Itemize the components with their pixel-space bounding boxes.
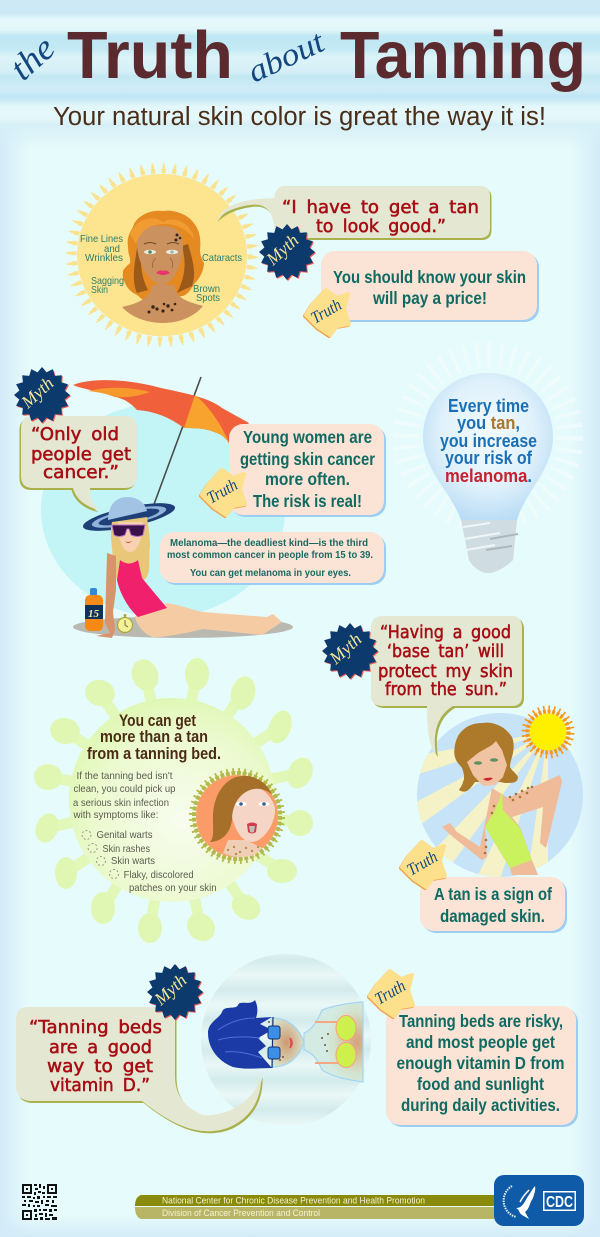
bulb text: melanoma. <box>445 466 532 486</box>
truth box 1: You should know your skin <box>333 267 526 287</box>
myth speech bubble 4: “Tanning beds <box>29 1017 162 1038</box>
footer organization bars: Division of Cancer Prevention and Control <box>162 1208 320 1219</box>
myth speech bubble 2 <box>20 416 137 512</box>
symptom list: patches on your skin <box>129 882 217 894</box>
myth speech bubble 4: vitamin D.” <box>50 1075 150 1096</box>
myth speech bubble 1: “I have to get a tan <box>282 197 479 218</box>
panel: base tan myth <box>322 616 583 933</box>
myth badge 3 <box>322 623 379 680</box>
sunbathing woman <box>73 497 293 638</box>
myth badge 2 <box>14 367 71 424</box>
subtitle: Your natural skin color is great the way it is! <box>53 103 546 131</box>
infection paragraph <box>73 770 176 821</box>
truth badge 2: Truth <box>204 475 241 507</box>
sunscreen bottle: 15 <box>88 608 100 620</box>
myth badge 2: Myth <box>17 373 57 413</box>
truth box 3: damaged skin. <box>440 906 545 926</box>
truth badge 1: Truth <box>308 295 345 327</box>
damage labels: Cataracts <box>202 252 242 264</box>
truth box 2 <box>229 424 386 517</box>
myth speech bubble 3: protect my skin <box>378 661 513 682</box>
beach umbrella <box>73 377 249 507</box>
HHS eagle <box>504 1186 535 1219</box>
truth box 3: A tan is a sign of <box>434 884 552 904</box>
woman with tan damage <box>442 723 562 875</box>
myth speech bubble 2: people get <box>31 444 131 465</box>
long blonde hair <box>111 517 150 580</box>
footer organization bars: National Center for Chronic Disease Prevention and Health Promotion <box>162 1196 425 1206</box>
panel: myth 1 look good <box>67 164 539 346</box>
truth box 4: Tanning beds are risky, <box>399 1011 563 1031</box>
bulb text: Every time <box>448 396 529 416</box>
bulb text: your risk of <box>445 448 533 468</box>
myth speech bubble 2: cancer.” <box>43 462 119 483</box>
damage labels: Sagging <box>91 275 124 287</box>
symptom list: Skin rashes <box>102 843 150 855</box>
panel: light bulb melanoma fact <box>406 355 570 573</box>
infection paragraph: a serious skin infection <box>73 797 169 809</box>
CDC and HHS logo <box>494 1175 584 1226</box>
myth speech bubble 2: “Only old <box>31 424 119 445</box>
truth box 4: during daily activities. <box>401 1095 560 1115</box>
infection heading: more than a tan <box>100 728 208 746</box>
footer organization bars <box>135 1195 494 1219</box>
person lying on tanning bed <box>208 1000 363 1082</box>
arm <box>96 553 116 638</box>
melanoma fact box: Melanoma—the deadliest kind—is the third <box>170 537 368 549</box>
damage labels: Wrinkles <box>85 252 123 264</box>
legs <box>135 603 282 637</box>
myth speech bubble 4 <box>16 1007 263 1133</box>
teal backdrop ellipse <box>41 403 285 617</box>
panel: myth 2 only old people <box>14 367 386 638</box>
sunglasses <box>112 525 145 536</box>
ground shadow <box>73 616 293 638</box>
portrait: woman with infection <box>191 770 283 862</box>
CDC mark: CDC <box>546 1194 573 1211</box>
bulb text: you tan, <box>457 413 520 433</box>
striped tanning bed circle <box>201 954 371 1126</box>
myth badge 4 <box>147 964 204 1021</box>
illustration: aged woman in sun <box>67 164 257 346</box>
bulb glass <box>423 373 553 520</box>
truth box 4 <box>386 1006 578 1127</box>
title: Truth <box>67 18 233 93</box>
QR code <box>22 1184 57 1220</box>
melanoma fact box: You can get melanoma in your eyes. <box>190 567 351 579</box>
melanoma fact box <box>160 532 386 585</box>
symptom list: Flaky, discolored <box>124 869 194 881</box>
virus shape <box>32 656 318 947</box>
myth speech bubble 1: to look good.” <box>316 216 446 237</box>
title: the <box>2 28 63 88</box>
myth speech bubble 1 <box>216 186 492 240</box>
alarm clock <box>118 614 132 632</box>
damage labels <box>80 233 242 304</box>
myth speech bubble 3: from the sun.” <box>385 679 507 700</box>
myth speech bubble 3: “Having a good <box>380 622 511 643</box>
symptom list: Skin warts <box>111 855 155 867</box>
damage labels: Skin <box>91 284 108 296</box>
panel: vitamin D myth <box>16 954 578 1133</box>
swimsuit <box>117 560 167 617</box>
myth speech bubble 3: ‘base tan’ will <box>387 641 504 662</box>
face <box>118 522 143 552</box>
truth box 4: food and sunlight <box>417 1074 544 1094</box>
myth badge 1: Myth <box>262 230 302 270</box>
symptom list: Genital warts <box>96 829 152 841</box>
damage labels: Brown <box>193 283 220 295</box>
myth speech bubble 4: are a good <box>49 1037 152 1058</box>
infection heading <box>87 712 221 763</box>
woman with skin damage <box>122 211 204 323</box>
title: about <box>242 22 331 89</box>
bulb rays <box>406 355 570 519</box>
hat <box>81 497 177 537</box>
myth badge 3: Myth <box>325 629 365 669</box>
bulb text: you increase <box>440 431 537 451</box>
infection heading: You can get <box>119 712 196 730</box>
blue circle with sun rays <box>417 713 583 877</box>
truth badge 4: Truth <box>372 976 409 1008</box>
truth box 1: will pay a price! <box>372 288 487 308</box>
truth box 2: The risk is real! <box>253 491 362 511</box>
truth box 4: enough vitamin D from <box>396 1053 564 1073</box>
truth box 2: more often. <box>265 469 350 489</box>
symptom list <box>82 829 217 894</box>
infection paragraph: with symptoms like: <box>73 809 158 821</box>
infection heading: from a tanning bed. <box>87 745 221 763</box>
myth speech bubble 3 <box>371 616 524 757</box>
truth badge 3: Truth <box>404 847 441 879</box>
infection paragraph: clean, you could pick up <box>74 783 176 795</box>
truth box 3 <box>420 877 567 933</box>
bulb base <box>461 520 518 573</box>
truth box 4: and most people get <box>406 1032 555 1052</box>
bulb text <box>440 396 537 486</box>
melanoma fact box: most common cancer in people from 15 to 39. <box>167 549 373 561</box>
sun body and rays <box>67 164 257 346</box>
title <box>2 18 586 93</box>
truth box 2: Young women are <box>243 427 372 447</box>
myth badge 1 <box>259 224 316 281</box>
myth badge 4: Myth <box>150 970 190 1010</box>
panel: tanning bed infection virus <box>32 656 318 947</box>
infection paragraph: If the tanning bed isn't <box>76 770 173 782</box>
sunscreen bottle <box>85 588 103 631</box>
damage labels: and <box>104 243 120 255</box>
title: Tanning <box>340 18 586 93</box>
damage labels: Fine Lines <box>80 233 123 245</box>
truth box 1 <box>321 251 539 322</box>
truth box 2: getting skin cancer <box>240 449 375 469</box>
myth speech bubble 4: way to get <box>47 1056 153 1077</box>
damage labels: Spots <box>196 292 220 304</box>
sun <box>524 708 572 756</box>
